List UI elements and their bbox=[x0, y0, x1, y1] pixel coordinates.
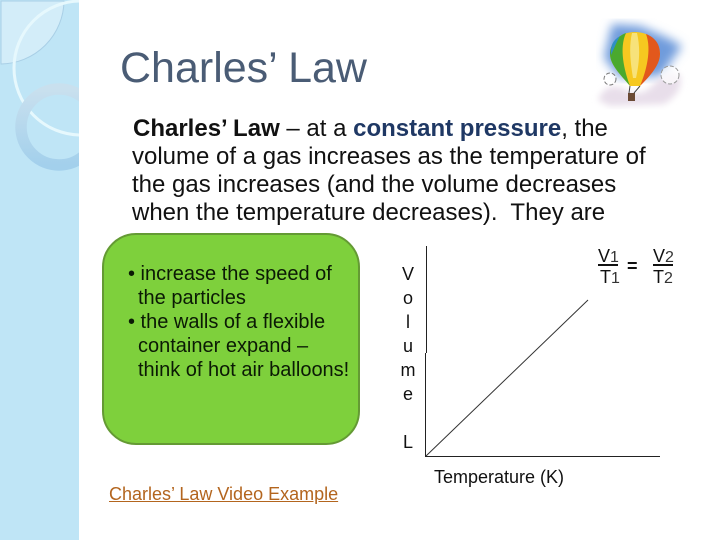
y axis label: L bbox=[403, 432, 413, 452]
title: Charles’ Law bbox=[120, 44, 367, 92]
callout text: • the walls of a flexible bbox=[128, 311, 325, 333]
callout text: think of hot air balloons! bbox=[138, 359, 349, 381]
video link: Charles’ Law Video Example bbox=[109, 484, 338, 504]
y axis label: m bbox=[400, 360, 416, 380]
y axis label: u bbox=[403, 336, 413, 356]
callout text: the particles bbox=[138, 287, 246, 309]
T1: T1 bbox=[600, 267, 620, 287]
balloon illustration bbox=[598, 18, 686, 108]
equals sign: = bbox=[627, 256, 638, 276]
definition text block: volume of a gas increases as the temperature of bbox=[132, 143, 646, 170]
callout text bbox=[128, 263, 349, 381]
y axis label: o bbox=[403, 288, 413, 308]
V2 over T2: V2 bbox=[653, 246, 674, 266]
callout text: • increase the speed of bbox=[128, 263, 332, 285]
y axis label: V bbox=[402, 264, 414, 284]
y axis label bbox=[400, 264, 416, 452]
definition text block: the gas increases (and the volume decreases bbox=[132, 171, 616, 198]
definition text block: Charles’ Law – at a constant pressure, the bbox=[133, 115, 608, 142]
V1 over T1: V1 bbox=[598, 246, 619, 266]
definition text block: when the temperature decreases). They are bbox=[132, 199, 605, 226]
T2: T2 bbox=[653, 267, 673, 287]
panel: green callout bbox=[102, 233, 360, 445]
definition text block bbox=[132, 115, 646, 226]
y axis label: e bbox=[403, 384, 413, 404]
left decorative sidebar bbox=[0, 0, 79, 540]
x axis label: Temperature (K) bbox=[434, 467, 564, 487]
formula bbox=[598, 246, 674, 287]
callout text: container expand – bbox=[138, 335, 308, 357]
line chart: volume vs temperature bbox=[425, 246, 660, 457]
y axis label: l bbox=[406, 312, 410, 332]
